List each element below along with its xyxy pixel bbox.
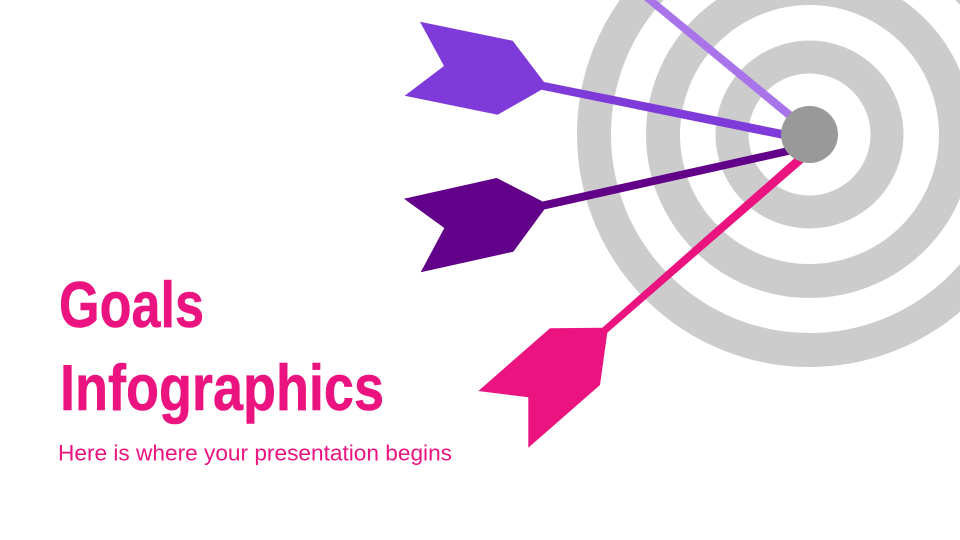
subtitle: Here is where your presentation begins xyxy=(58,440,452,466)
target bullseye xyxy=(781,106,838,163)
title: Infographics xyxy=(60,351,384,424)
arrow: dark purple xyxy=(404,144,800,272)
target rings xyxy=(594,0,960,350)
arrow: pink xyxy=(478,148,812,448)
arrow: purple xyxy=(405,22,800,142)
title: Goals xyxy=(59,268,204,341)
title xyxy=(59,268,384,424)
arrow: light purple shaft xyxy=(644,0,808,130)
